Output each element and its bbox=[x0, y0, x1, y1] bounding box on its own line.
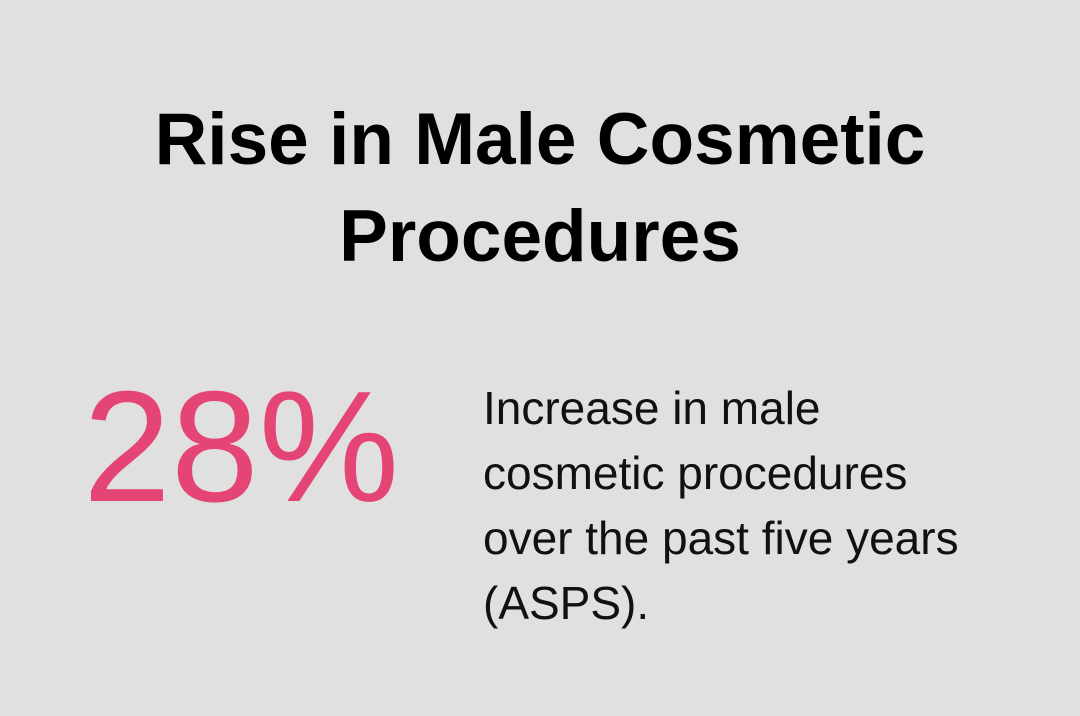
description text bbox=[483, 382, 959, 629]
description text: over the past five years bbox=[483, 512, 959, 564]
title bbox=[155, 99, 925, 277]
description text: Increase in male bbox=[483, 382, 820, 434]
stat: 28%: 28% bbox=[83, 359, 399, 535]
title: Rise in Male Cosmetic bbox=[155, 99, 925, 180]
description text: cosmetic procedures bbox=[483, 447, 907, 499]
description text: (ASPS). bbox=[483, 577, 649, 629]
title: Procedures bbox=[339, 196, 741, 277]
